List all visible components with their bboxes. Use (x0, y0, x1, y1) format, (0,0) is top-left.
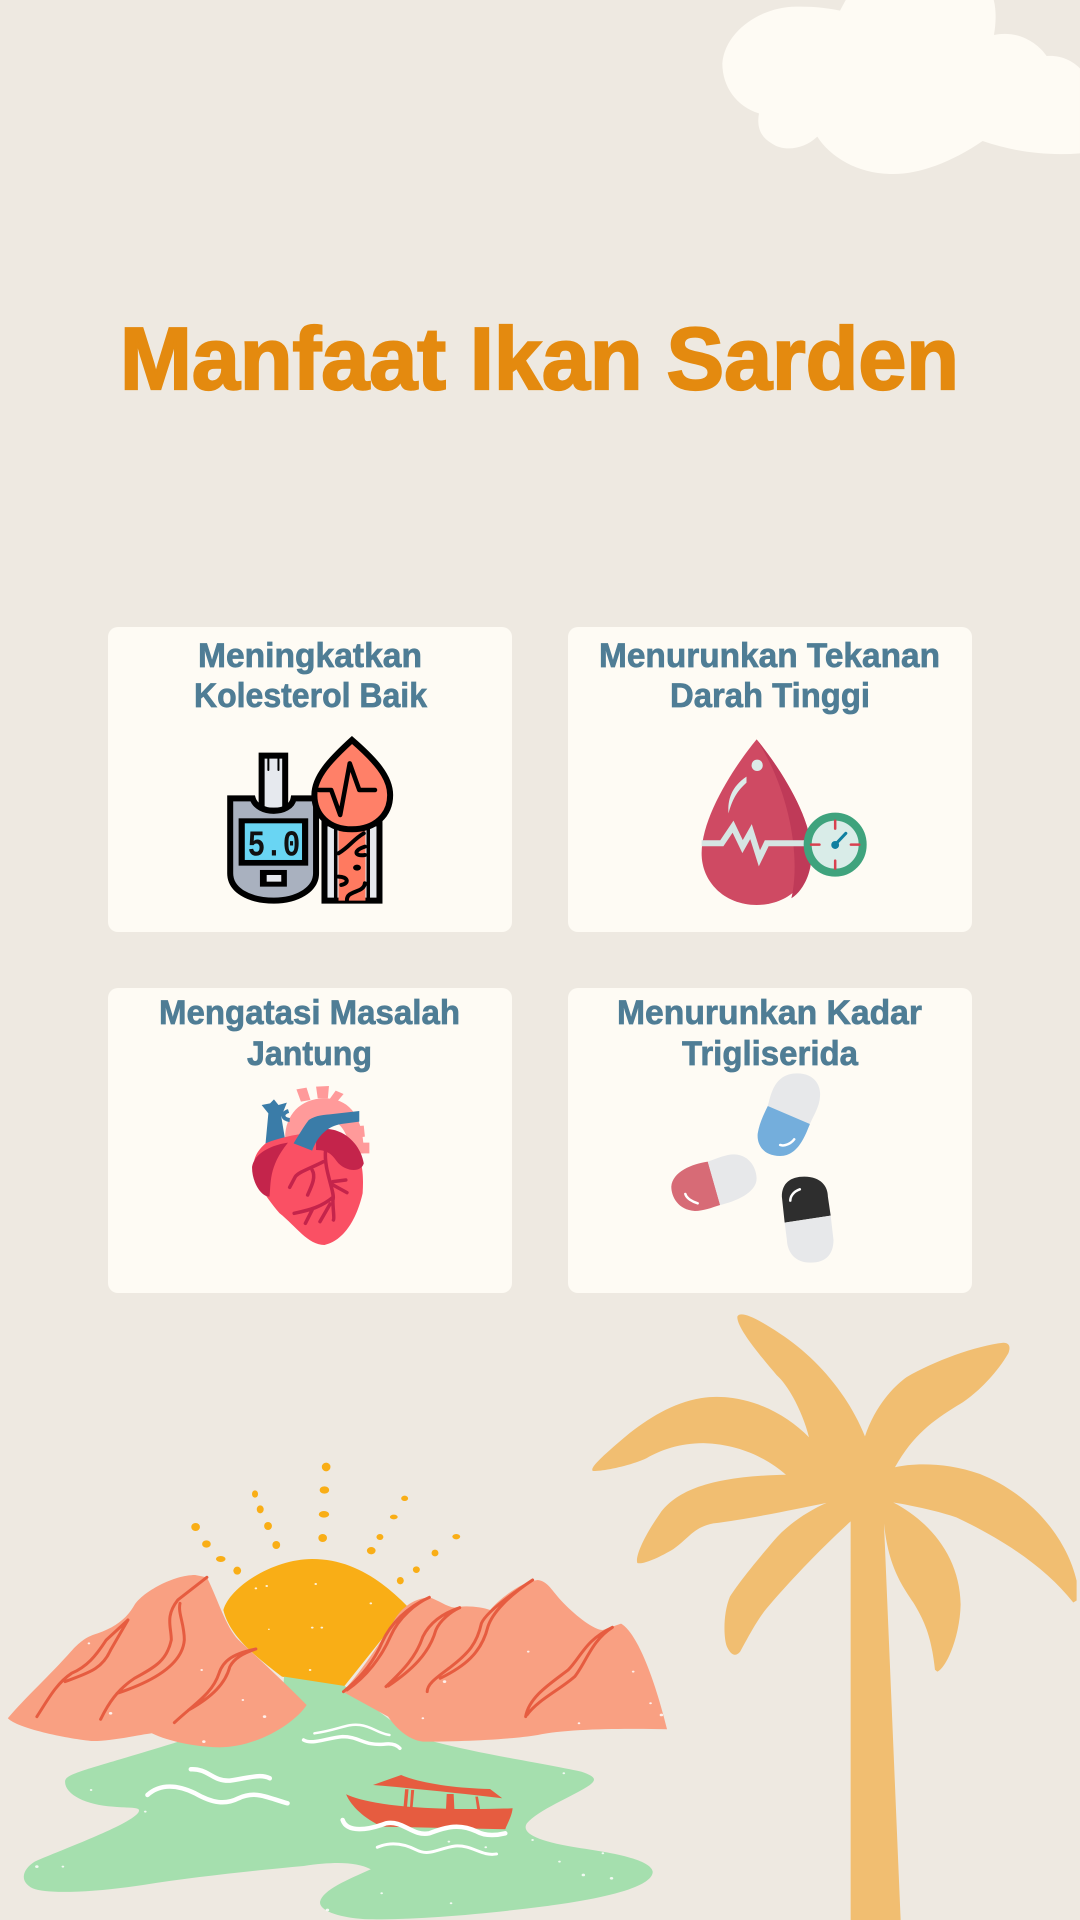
icon: glucose meter and blood drop: 5.0 (248, 826, 300, 866)
speckles (35, 1583, 663, 1911)
heading: Mengatasi Masalah Jantung: Jantung (247, 1035, 372, 1073)
heading: Menurunkan Kadar Trigliserida: Menurunkan Kadar (617, 994, 922, 1032)
icon: heart (252, 1086, 369, 1245)
sun (223, 1559, 408, 1688)
river (24, 1677, 653, 1919)
heading: Meningkatkan Kolesterol Baik: Meningkatkan (198, 637, 422, 675)
panel: Meningkatkan Kolesterol Baik (108, 627, 512, 932)
sun rays (191, 1463, 460, 1584)
heading: Meningkatkan Kolesterol Baik: Kolesterol Baik (194, 677, 427, 715)
panel: Menurunkan Tekanan Darah Tinggi (568, 627, 972, 932)
water waves (147, 1725, 505, 1854)
heading: Menurunkan Tekanan Darah Tinggi (599, 637, 940, 715)
landscape: sun, mountains, river and boat (8, 1463, 667, 1919)
boat (346, 1775, 513, 1829)
heading: Mengatasi Masalah Jantung: Mengatasi Masalah (159, 994, 460, 1032)
icon: capsules (671, 1073, 833, 1263)
palm tree (592, 1314, 1077, 1920)
right mountain (343, 1580, 667, 1742)
heading: Menurunkan Tekanan Darah Tinggi: Menurunkan Tekanan (599, 637, 940, 675)
title: Manfaat Ikan Sarden (120, 309, 959, 408)
icon: glucose meter and blood drop (230, 740, 390, 901)
panel: Menurunkan Kadar Trigliserida (568, 988, 972, 1293)
heading: Mengatasi Masalah Jantung (159, 994, 460, 1073)
panel: Mengatasi Masalah Jantung (108, 988, 512, 1293)
left mountain (8, 1575, 307, 1747)
heading: Menurunkan Kadar Trigliserida (617, 994, 922, 1073)
icon: blood drop with gauge (702, 739, 863, 905)
cloud (722, 0, 1080, 174)
heading: Menurunkan Kadar Trigliserida: Trigliserida (682, 1035, 859, 1073)
heading: Meningkatkan Kolesterol Baik (194, 637, 427, 715)
heading: Menurunkan Tekanan Darah Tinggi: Darah Tinggi (670, 677, 870, 715)
